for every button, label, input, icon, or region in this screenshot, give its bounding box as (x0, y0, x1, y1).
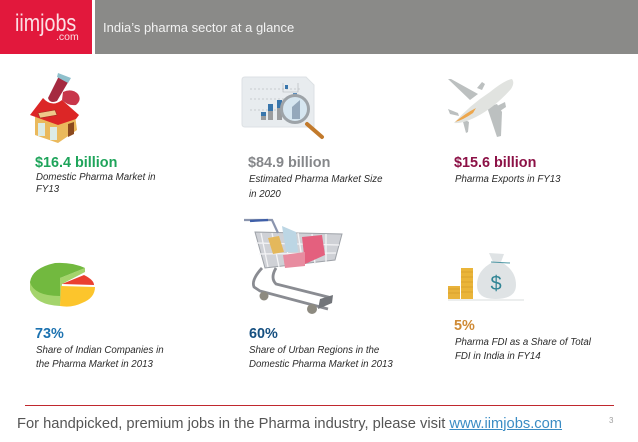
caption: Share of Indian Companies in (36, 345, 164, 356)
stat: exports (454, 155, 561, 185)
value: 5% (454, 318, 475, 334)
footer rule (25, 405, 614, 406)
stat: FDI (454, 318, 592, 362)
caption: Pharma FDI as a Share of Total (455, 337, 591, 348)
caption: Domestic Pharma Market in 2013 (249, 359, 393, 370)
footer text: For handpicked, premium jobs in the Pharma industry, please visit www.iimjobs.com (17, 416, 562, 432)
value: 60% (249, 326, 278, 342)
caption (36, 345, 164, 370)
value: 73% (35, 326, 64, 342)
caption (36, 172, 156, 195)
caption: FDI in India in FY14 (455, 351, 541, 362)
logo wordmark: iimjobs (15, 10, 76, 37)
header: logo panel (0, 0, 92, 54)
icon: chart report with magnifier (242, 77, 322, 137)
stat: market size (248, 155, 383, 200)
stat: urban regions (249, 326, 393, 370)
value: $16.4 billion (35, 155, 117, 171)
logo .com: .com (56, 31, 79, 43)
icon: 3D pie chart (30, 263, 95, 307)
icon: shopping cart (244, 220, 342, 314)
caption: Pharma Exports in FY13 (455, 174, 561, 185)
caption: Share of Urban Regions in the (249, 345, 379, 356)
caption (455, 337, 592, 362)
icon: money bag and coins: $ (490, 273, 502, 295)
stat: indian companies (35, 326, 164, 370)
header: title bar (95, 0, 638, 54)
stat: domestic market (35, 155, 156, 195)
icon: airplane (448, 79, 513, 137)
caption: Domestic Pharma Market in (36, 172, 156, 183)
icon: money bag and coins (448, 253, 524, 300)
caption: FY13 (36, 184, 59, 195)
title: India’s pharma sector at a glance (103, 20, 294, 35)
caption: Estimated Pharma Market Size (249, 174, 383, 185)
value: $15.6 billion (454, 155, 536, 171)
caption: the Pharma Market in 2013 (36, 359, 153, 370)
caption (249, 345, 393, 370)
value: $84.9 billion (248, 155, 330, 171)
page number: 3 (609, 416, 613, 425)
caption: in 2020 (249, 189, 281, 200)
caption (249, 174, 383, 200)
